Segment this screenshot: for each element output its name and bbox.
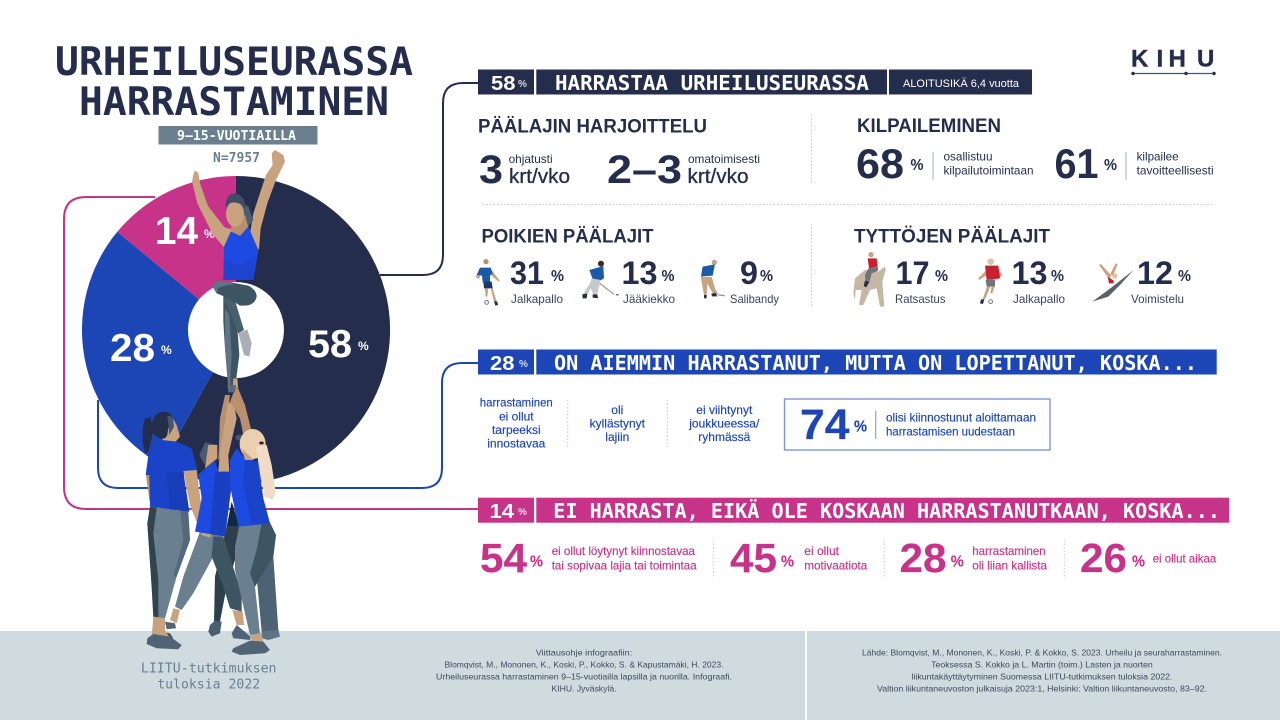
- middle woman upper: [195, 395, 237, 537]
- header bar: 28%: ON AIEMMIN HARRASTANUT, MUTTA ON LOPETTANUT, KOSKA...: [554, 351, 1197, 375]
- value: 14%: 14: [155, 210, 198, 253]
- reason: ei viihtynyt: [688, 403, 760, 444]
- value: 31% jalkapallo: Jalkapallo: [511, 292, 563, 306]
- title: HARRASTAMINEN: [79, 80, 389, 125]
- reason: ei viihtynyt: ryhmässä: [698, 430, 751, 444]
- stat: 54%: tai sopivaa lajia tai toimintaa: [552, 558, 697, 572]
- reason: ei viihtynyt: joukkueessa/: [688, 416, 760, 430]
- block: poikien päälajit: POIKIEN PÄÄLAJIT: [482, 227, 654, 248]
- panel: 28% lopettanut: [478, 350, 1217, 451]
- right woman legs: [232, 523, 280, 655]
- stat: 54%: [480, 535, 697, 581]
- reason: kyllästynyt: [590, 403, 646, 444]
- stat: 28%: harrastaminen: [972, 544, 1046, 558]
- block: päälajin harjoittelu: ohjatusti: [509, 152, 553, 166]
- icon: horse rider: [853, 252, 886, 307]
- slice: 58%: [162, 176, 390, 484]
- callout: 74%: %: [854, 419, 867, 436]
- stat: 45%: 45: [730, 535, 777, 581]
- right woman upper: [227, 385, 276, 527]
- stat: 28%: oli liian kallista: [972, 558, 1047, 572]
- reason: ei innostavaa: harrastaminen: [480, 396, 553, 410]
- callout: 74%: 74: [800, 401, 850, 449]
- value: 31% jalkapallo: [510, 255, 564, 306]
- value: 9% salibandy: Salibandy: [730, 292, 779, 306]
- illustration: three supporting athletes: [143, 385, 280, 655]
- header bar: 58%: HARRASTAA URHEILUSEURASSA: [555, 71, 870, 95]
- value: 13% jalkapallo: %: [1051, 268, 1064, 285]
- value: 12% voimistelu: [1131, 255, 1191, 306]
- citation text: Viittausohje infograafiin:: [536, 648, 632, 658]
- stat: 26%: [1080, 535, 1217, 581]
- age label: 9–15-VUOTIAILLA: [177, 129, 296, 144]
- stat: 54%: 54: [480, 535, 527, 581]
- donut chart: [82, 176, 390, 484]
- reason: ei innostavaa: tarpeeksi: [492, 423, 541, 437]
- stat: 45%: motivaatiota: [804, 558, 868, 572]
- slice: 14%: [117, 176, 236, 299]
- citation text: Blomqvist, M., Mononen, K., Koski, P., Kokko, S. & Kapustamäki, H. 2023.: [444, 660, 724, 670]
- connector: 28% line: [98, 363, 478, 488]
- source text: liikuntakäyttäytyminen Suomessa LIITU-tutkimuksen tuloksia 2022.: [912, 672, 1172, 682]
- stat: 26%: 26: [1080, 535, 1127, 581]
- source text: Lähde: Blomqvist, M., Mononen, K., Koski, P. & Kokko, S. 2023. Urheilu ja seuraharrastaminen.: [862, 648, 1222, 658]
- value: 58%: %: [358, 339, 369, 353]
- value: 13% jääkiekko: 13: [622, 255, 658, 291]
- value: 28%: %: [161, 343, 172, 357]
- block: tyttöjen päälajit: TYTTÖJEN PÄÄLAJIT: [854, 227, 1050, 248]
- block: kilpaileminen: 68: [856, 140, 904, 187]
- header bar: 28%: 28: [490, 352, 514, 375]
- value: 58%: 58: [308, 323, 352, 366]
- stat: 26%: ei ollut aikaa: [1153, 551, 1217, 565]
- block: tyttöjen päälajit: [853, 227, 1191, 307]
- connector: 14% line: [64, 197, 478, 509]
- reason: kyllästynyt: kyllästynyt: [590, 416, 646, 430]
- value: 17% ratsastus: [895, 255, 948, 306]
- topmost foot and grip: [227, 385, 236, 392]
- middle woman legs: [165, 532, 251, 640]
- header bar: 14%: %: [518, 507, 527, 518]
- block: kilpaileminen: kilpailutoimintaan: [944, 164, 1034, 178]
- source text: [862, 648, 1222, 694]
- slice: 28%: [82, 232, 213, 465]
- value: 9% salibandy: [730, 255, 779, 306]
- block: kilpaileminen: 61: [1054, 140, 1098, 187]
- block: kilpaileminen: [856, 116, 1214, 187]
- icon: soccer girl: [978, 258, 1002, 304]
- value: 9% salibandy: %: [760, 268, 773, 285]
- logo: KIHU: KIHU: [1131, 46, 1214, 73]
- reason: kyllästynyt: lajiin: [605, 430, 629, 444]
- stat: 26%: %: [1132, 554, 1145, 571]
- reason: ei innostavaa: ei ollut: [499, 409, 534, 423]
- value: 13% jalkapallo: Jalkapallo: [1013, 292, 1065, 306]
- block: päälajin harjoittelu: 2–3: [607, 148, 682, 192]
- citation text: KIHU. Jyväskylä.: [552, 684, 616, 694]
- panel: 58% harrastaa: [475, 70, 1215, 307]
- citation text: Urheiluseurassa harrastaminen 9–15-vuotiailla lapsilla ja nuorilla. Infograafi.: [436, 672, 732, 682]
- block: päälajin harjoittelu: krt/vko: [688, 166, 748, 188]
- value: 17% ratsastus: Ratsastus: [895, 292, 946, 306]
- block: kilpaileminen: KILPAILEMINEN: [857, 116, 1001, 137]
- block: kilpaileminen: osallistuu: [944, 150, 992, 164]
- value: 28%: [110, 327, 172, 370]
- stat: 45%: ei ollut: [804, 544, 840, 558]
- value: 13% jääkiekko: %: [662, 268, 674, 285]
- icon: ice hockey player: [582, 261, 619, 298]
- source text: Valtion liikuntaneuvoston julkaisuja 2023:1, Helsinki: Valtion liikuntaneuvosto, 83–92.: [877, 684, 1207, 694]
- block: päälajin harjoittelu: krt/vko: [509, 166, 570, 188]
- header bar: 14%: 14: [490, 500, 515, 523]
- stat: 28%: 28: [900, 535, 946, 581]
- block: päälajin harjoittelu: [478, 116, 760, 192]
- callout: 74%: harrastamisen uudestaan: [886, 425, 1015, 439]
- header bar: 28%: %: [519, 359, 528, 370]
- value: 12% voimistelu: 12: [1137, 255, 1173, 291]
- icon: gymnast: [1092, 263, 1134, 302]
- footer band: [0, 631, 1280, 720]
- icon: floorball player: [701, 260, 725, 298]
- block: kilpaileminen: tavoitteellisesti: [1137, 164, 1214, 178]
- illustration: top gymnast: [192, 150, 285, 390]
- value: 13% jääkiekko: [622, 255, 675, 306]
- panel: 14% ei harrasta: [478, 498, 1229, 581]
- stat: 28%: %: [951, 554, 964, 571]
- value: 28%: 28: [110, 327, 155, 370]
- stat: 45%: [730, 535, 868, 581]
- back woman legs: [208, 527, 240, 637]
- value: 12% voimistelu: %: [1178, 268, 1191, 285]
- block: kilpaileminen: kilpailee: [1137, 150, 1179, 164]
- block: kilpaileminen: %: [1104, 157, 1117, 174]
- reason: ei innostavaa: [480, 396, 553, 451]
- value: 14%: %: [204, 227, 215, 241]
- block: päälajin harjoittelu: omatoimisesti: [688, 152, 760, 166]
- block: kilpaileminen: %: [910, 157, 924, 174]
- source text: Teoksessa S. Kokko ja L. Martin (toim.) Lasten ja nuorten: [931, 660, 1153, 670]
- callout: 74%: [784, 399, 1050, 450]
- value: 12% voimistelu: Voimistelu: [1131, 292, 1184, 306]
- reason: ei viihtynyt: ei viihtynyt: [696, 403, 753, 417]
- value: 17% ratsastus: %: [935, 268, 948, 285]
- value: 13% jalkapallo: [1012, 255, 1065, 306]
- sample size: N=7957: [213, 151, 260, 166]
- stat: 45%: %: [781, 554, 794, 571]
- callout: 74%: olisi kiinnostunut aloittamaan: [886, 411, 1036, 425]
- header bar: 14%: EI HARRASTA, EIKÄ OLE KOSKAAN HARRASTANUTKAAN, KOSKA...: [553, 499, 1220, 523]
- research label: [141, 662, 277, 692]
- block: päälajin harjoittelu: 3: [479, 148, 503, 192]
- left woman upper: [143, 412, 213, 538]
- reason: ei innostavaa: innostavaa: [487, 437, 546, 451]
- left woman legs: [147, 507, 190, 649]
- block: poikien päälajit: [475, 227, 779, 306]
- value: 13% jääkiekko: Jääkiekko: [623, 292, 675, 306]
- title: [55, 40, 413, 125]
- research label: LIITU-tutkimuksen: [141, 662, 277, 677]
- value: 31% jalkapallo: %: [551, 268, 564, 285]
- age label: [158, 126, 318, 144]
- stat: 28%: [900, 535, 1047, 581]
- header bar: 58%: ALOITUSIKÄ 6,4 vuotta: [903, 78, 1020, 90]
- research label: tuloksia 2022: [157, 677, 260, 692]
- header bar: 58%: 58: [491, 72, 516, 95]
- citation text: [436, 648, 732, 694]
- value: 17% ratsastus: 17: [896, 255, 930, 291]
- stat: 54%: ei ollut löytynyt kiinnostavaa: [552, 544, 695, 558]
- title: URHEILUSEURASSA: [55, 40, 413, 85]
- icon: soccer boy: [475, 259, 500, 306]
- connector: 58% line: [380, 83, 478, 275]
- value: 31% jalkapallo: 31: [510, 255, 544, 291]
- value: 9% salibandy: 9: [740, 255, 758, 291]
- stat: 54%: %: [530, 554, 543, 571]
- block: päälajin harjoittelu: PÄÄLAJIN HARJOITTELU: [478, 116, 707, 138]
- reason: kyllästynyt: oli: [611, 403, 623, 417]
- value: 13% jalkapallo: 13: [1012, 255, 1048, 291]
- header bar: 58%: [478, 70, 1032, 95]
- header bar: 58%: %: [518, 79, 527, 90]
